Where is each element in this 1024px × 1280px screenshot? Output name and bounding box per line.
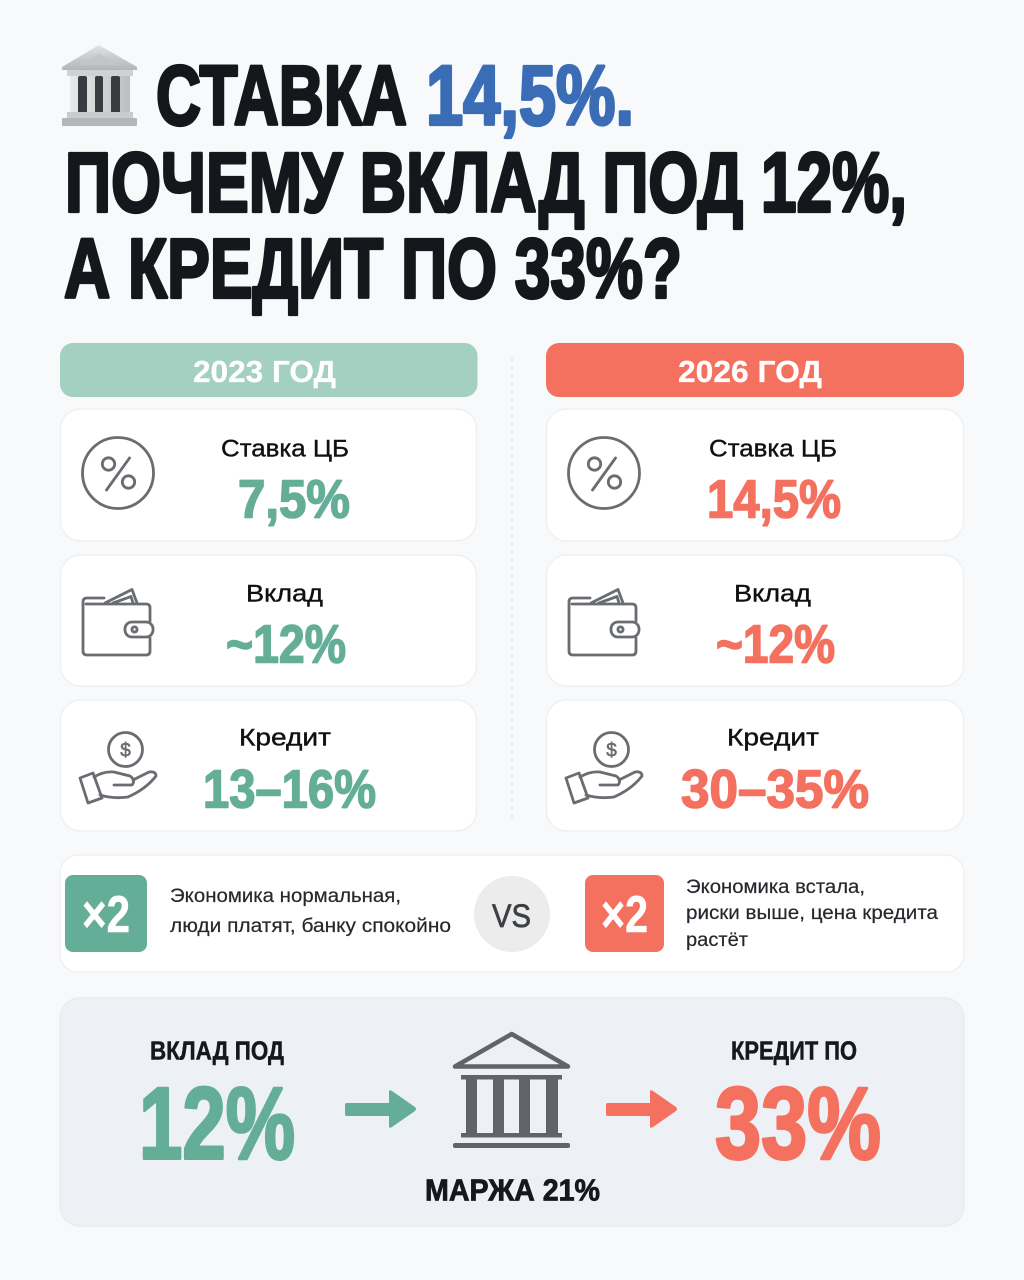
icon: hand with coin [80, 732, 156, 803]
title: А КРЕДИТ ПО 33%? [64, 222, 682, 316]
panel: 2023 column [60, 343, 478, 831]
card: deposit 2026: Вклад [734, 580, 811, 608]
card: deposit 2026: ~12% [716, 614, 835, 674]
panel: comparison strip [60, 855, 964, 972]
card: key rate 2026: 14,5% [707, 470, 841, 530]
loan label and value: КРЕДИТ ПО [731, 1036, 857, 1066]
loan label and value: 33% [715, 1066, 881, 1180]
icon: percent [568, 438, 640, 508]
card: deposit 2023: Вклад [246, 580, 323, 608]
badge: green x2: ×2 [82, 886, 130, 944]
deposit label and value: ВКЛАД ПОД [150, 1036, 284, 1066]
card: loan 2026 [546, 700, 964, 831]
arrow: green [345, 1090, 416, 1128]
text: stalled economy: риски выше, цена кредита [686, 903, 938, 924]
card: deposit 2023: ~12% [226, 614, 346, 674]
title: СТАВКА [156, 48, 407, 142]
card: loan 2023 [60, 700, 476, 831]
badge: red x2 [585, 875, 664, 952]
margin label: МАРЖА 21% [425, 1172, 600, 1208]
panel: bank margin [60, 998, 964, 1226]
arrow: red [606, 1090, 677, 1128]
card: key rate 2023 [60, 409, 476, 541]
panel: 2026 column [546, 343, 964, 831]
card: loan 2023: Кредит [239, 724, 331, 752]
card: key rate 2026 [546, 409, 964, 541]
title [64, 48, 907, 316]
header: 2023 [60, 343, 478, 397]
text: normal economy [170, 886, 451, 937]
text: stalled economy [686, 877, 938, 951]
card: key rate 2023: Ставка ЦБ [221, 436, 349, 462]
card: deposit 2026 [546, 555, 964, 686]
card: loan 2023: 13–16% [203, 760, 376, 820]
card: key rate 2026: Ставка ЦБ [709, 436, 837, 462]
text: normal economy: люди платят, банку спокойно [170, 916, 451, 937]
header: 2026 [546, 343, 964, 397]
icon: hand with coin [566, 732, 642, 803]
icon: hand with coin: $ [120, 740, 131, 762]
badge: red x2: ×2 [601, 886, 648, 944]
icon: wallet [83, 590, 153, 655]
text: stalled economy: Экономика встала, [686, 877, 865, 898]
deposit label and value: 12% [139, 1066, 295, 1180]
icon: wallet [569, 590, 639, 655]
icon: bank [453, 1034, 570, 1148]
title: 14,5%. [426, 48, 634, 142]
icon: percent [82, 438, 154, 508]
loan label and value [715, 1036, 881, 1180]
badge: VS [474, 876, 550, 952]
text: normal economy: Экономика нормальная, [170, 886, 401, 907]
icon: hand with coin: $ [606, 740, 617, 762]
header: 2023: 2023 ГОД [193, 354, 336, 389]
badge: green x2 [65, 875, 147, 952]
card: key rate 2023: 7,5% [238, 470, 350, 530]
card: loan 2026: 30–35% [681, 760, 869, 820]
text: stalled economy: растёт [686, 930, 748, 951]
badge: VS: VS [492, 898, 531, 934]
icon: classical bank emoji [62, 45, 137, 126]
card: loan 2026: Кредит [727, 724, 819, 752]
header: 2026: 2026 ГОД [678, 354, 822, 389]
deposit label and value [139, 1036, 295, 1180]
card: deposit 2023 [60, 555, 476, 686]
